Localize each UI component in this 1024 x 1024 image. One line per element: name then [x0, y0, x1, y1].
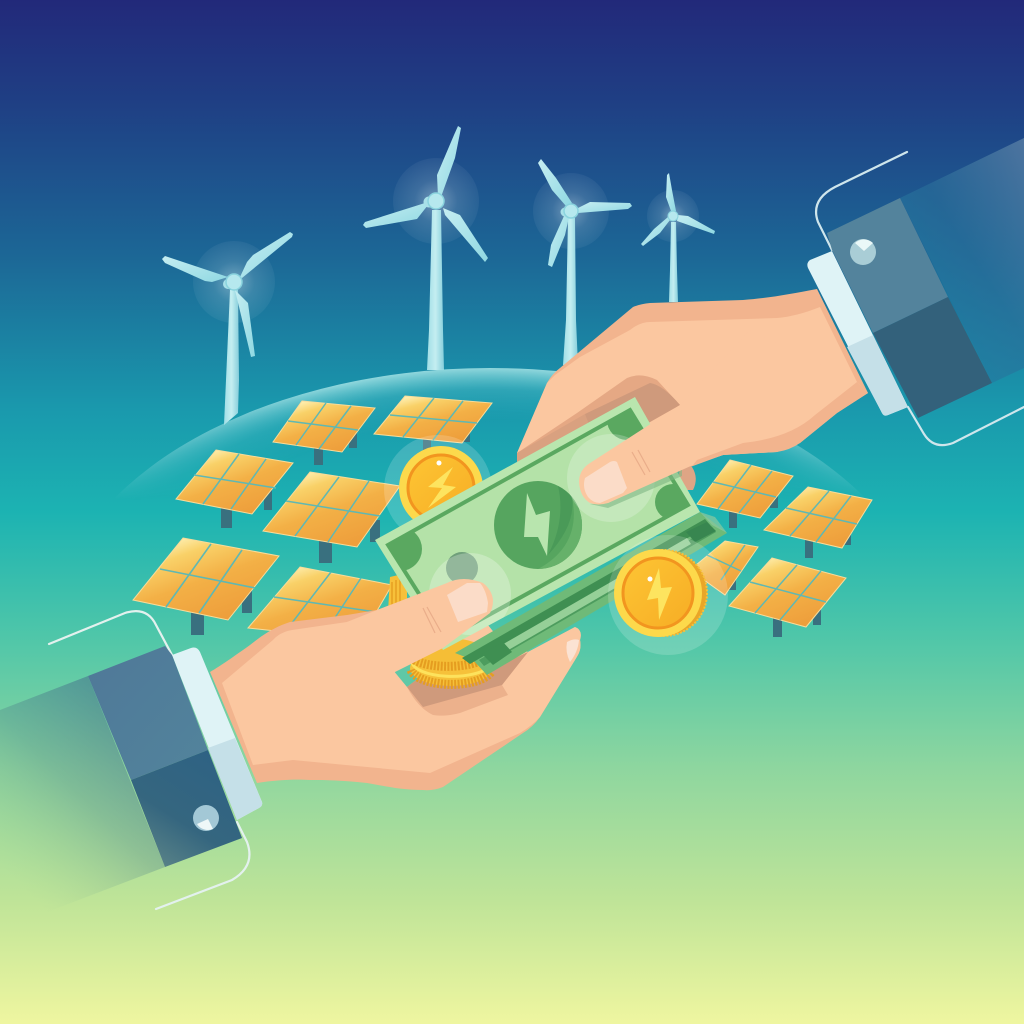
- solar panel A: [273, 401, 375, 465]
- note highlight halos: [429, 434, 655, 635]
- lower hand: thumb: [340, 579, 493, 700]
- background gap between thumb and palm: [393, 660, 422, 687]
- palm shadow rim: [407, 652, 528, 716]
- right sleeve outline: [816, 152, 1024, 445]
- thumb shadow on note: [590, 468, 682, 508]
- fingernail on lower finger: [566, 639, 579, 662]
- dark inner palm: [560, 383, 680, 450]
- right sleeve, dark band: [873, 297, 992, 418]
- note frame: [388, 410, 688, 638]
- gold coin stack under hand: [388, 573, 492, 686]
- knuckle creases: [423, 607, 441, 633]
- dark inner palm: [407, 652, 528, 707]
- solar panel H: [764, 487, 872, 558]
- upper hand: thumb: [579, 330, 868, 508]
- turbine 3: [533, 159, 632, 365]
- solar panel E: [133, 538, 279, 635]
- gold coin, upper: [384, 435, 492, 543]
- left sleeve, light band: [88, 646, 208, 780]
- solar panels: [133, 396, 872, 640]
- lightning bolt on note: [524, 493, 550, 556]
- turbine 4: [641, 173, 715, 302]
- left sleeve outline: [49, 611, 249, 909]
- palm shadow rim: [517, 375, 680, 470]
- left cuff button: [193, 805, 219, 831]
- palm edge band: [517, 414, 592, 466]
- banknote front: [375, 397, 700, 650]
- solar panel G: [697, 460, 793, 528]
- small watermark circle: [446, 552, 478, 584]
- finger behind bill: [678, 462, 696, 490]
- lower hand: palm and fingers: [210, 583, 581, 790]
- right cuff: [807, 251, 908, 416]
- central medallion: [494, 481, 582, 569]
- knuckle creases: [632, 450, 650, 475]
- right sleeve fade: [900, 138, 1024, 383]
- solar panel B: [374, 396, 492, 450]
- corner medallions: [390, 532, 422, 570]
- solar panel C: [176, 450, 293, 528]
- note inner panel: [380, 400, 700, 650]
- solar panel D: [263, 472, 400, 563]
- left cuff: [172, 648, 262, 820]
- stacked bills: [455, 512, 727, 675]
- gold coin, right: [608, 535, 728, 655]
- turbine 1: [162, 232, 293, 425]
- right sleeve, light band: [827, 198, 948, 333]
- solar panel J: [729, 558, 846, 637]
- left sleeve fade: [0, 676, 165, 930]
- left sleeve, dark band: [131, 750, 242, 867]
- right cuff button: [850, 239, 876, 265]
- turbine 2: [363, 126, 488, 370]
- solar panel I: [690, 541, 758, 595]
- thumbnail: [447, 583, 488, 622]
- thumbnail: [584, 461, 627, 503]
- hill / globe horizon: [122, 368, 858, 492]
- upper hand: back of hand: [517, 289, 868, 500]
- solar panel F: [248, 567, 392, 640]
- wind turbines: [162, 126, 715, 425]
